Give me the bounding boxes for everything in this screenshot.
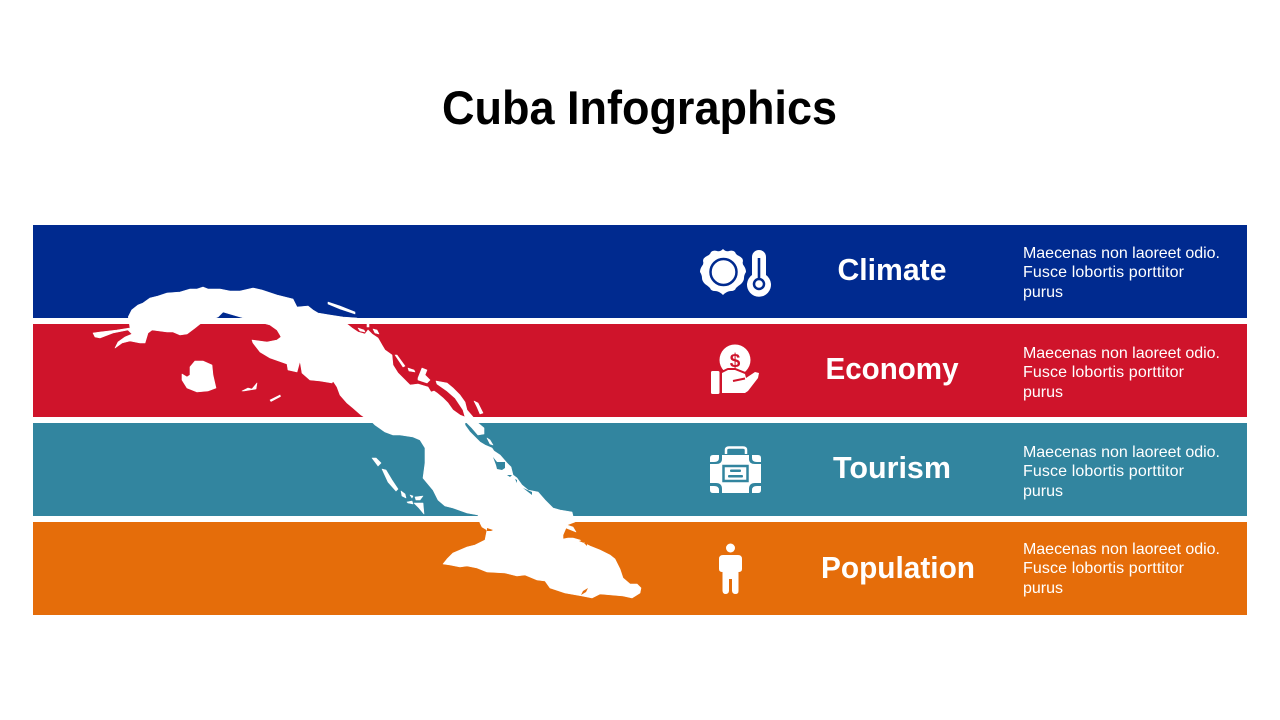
text block: economy: Maecenas non laoreet odio. — [1023, 345, 1220, 362]
icon: economy — [711, 344, 759, 394]
text block: tourism: Fusce lobortis porttitor — [1023, 463, 1185, 480]
text block: climate: Maecenas non laoreet odio. — [1023, 245, 1220, 262]
text block: climate: Fusce lobortis porttitor — [1023, 264, 1185, 281]
text block: population: Fusce lobortis porttitor — [1023, 560, 1185, 577]
title: Cuba Infographics — [442, 81, 837, 134]
heading: climate: Climate — [838, 252, 946, 287]
text block: tourism: Maecenas non laoreet odio. — [1023, 444, 1220, 461]
panel: climate band — [33, 225, 1247, 318]
map details: northeastern inlets — [493, 457, 532, 495]
panel: economy band — [33, 324, 1247, 417]
panel: tourism band — [33, 423, 1247, 516]
text block: climate — [1023, 245, 1220, 301]
map details: southeastern inlets — [487, 528, 588, 595]
icon: climate — [700, 249, 771, 297]
icon: population — [719, 544, 742, 594]
text block: economy: Fusce lobortis porttitor — [1023, 364, 1185, 381]
text block: tourism — [1023, 444, 1220, 500]
text block: population — [1023, 541, 1220, 597]
text block: population: Maecenas non laoreet odio. — [1023, 541, 1220, 558]
text block: climate: purus — [1023, 284, 1063, 301]
map of Cuba — [93, 287, 641, 598]
icon: tourism — [710, 448, 761, 493]
heading: economy: Economy — [826, 351, 959, 386]
heading: tourism: Tourism — [833, 450, 951, 485]
text block: tourism: purus — [1023, 483, 1063, 500]
text block: economy — [1023, 345, 1220, 401]
icon: economy: $ — [730, 351, 741, 372]
text block: population: purus — [1023, 580, 1063, 597]
panel: population band — [33, 522, 1247, 615]
text block: economy: purus — [1023, 384, 1063, 401]
heading: population: Population — [821, 550, 975, 585]
